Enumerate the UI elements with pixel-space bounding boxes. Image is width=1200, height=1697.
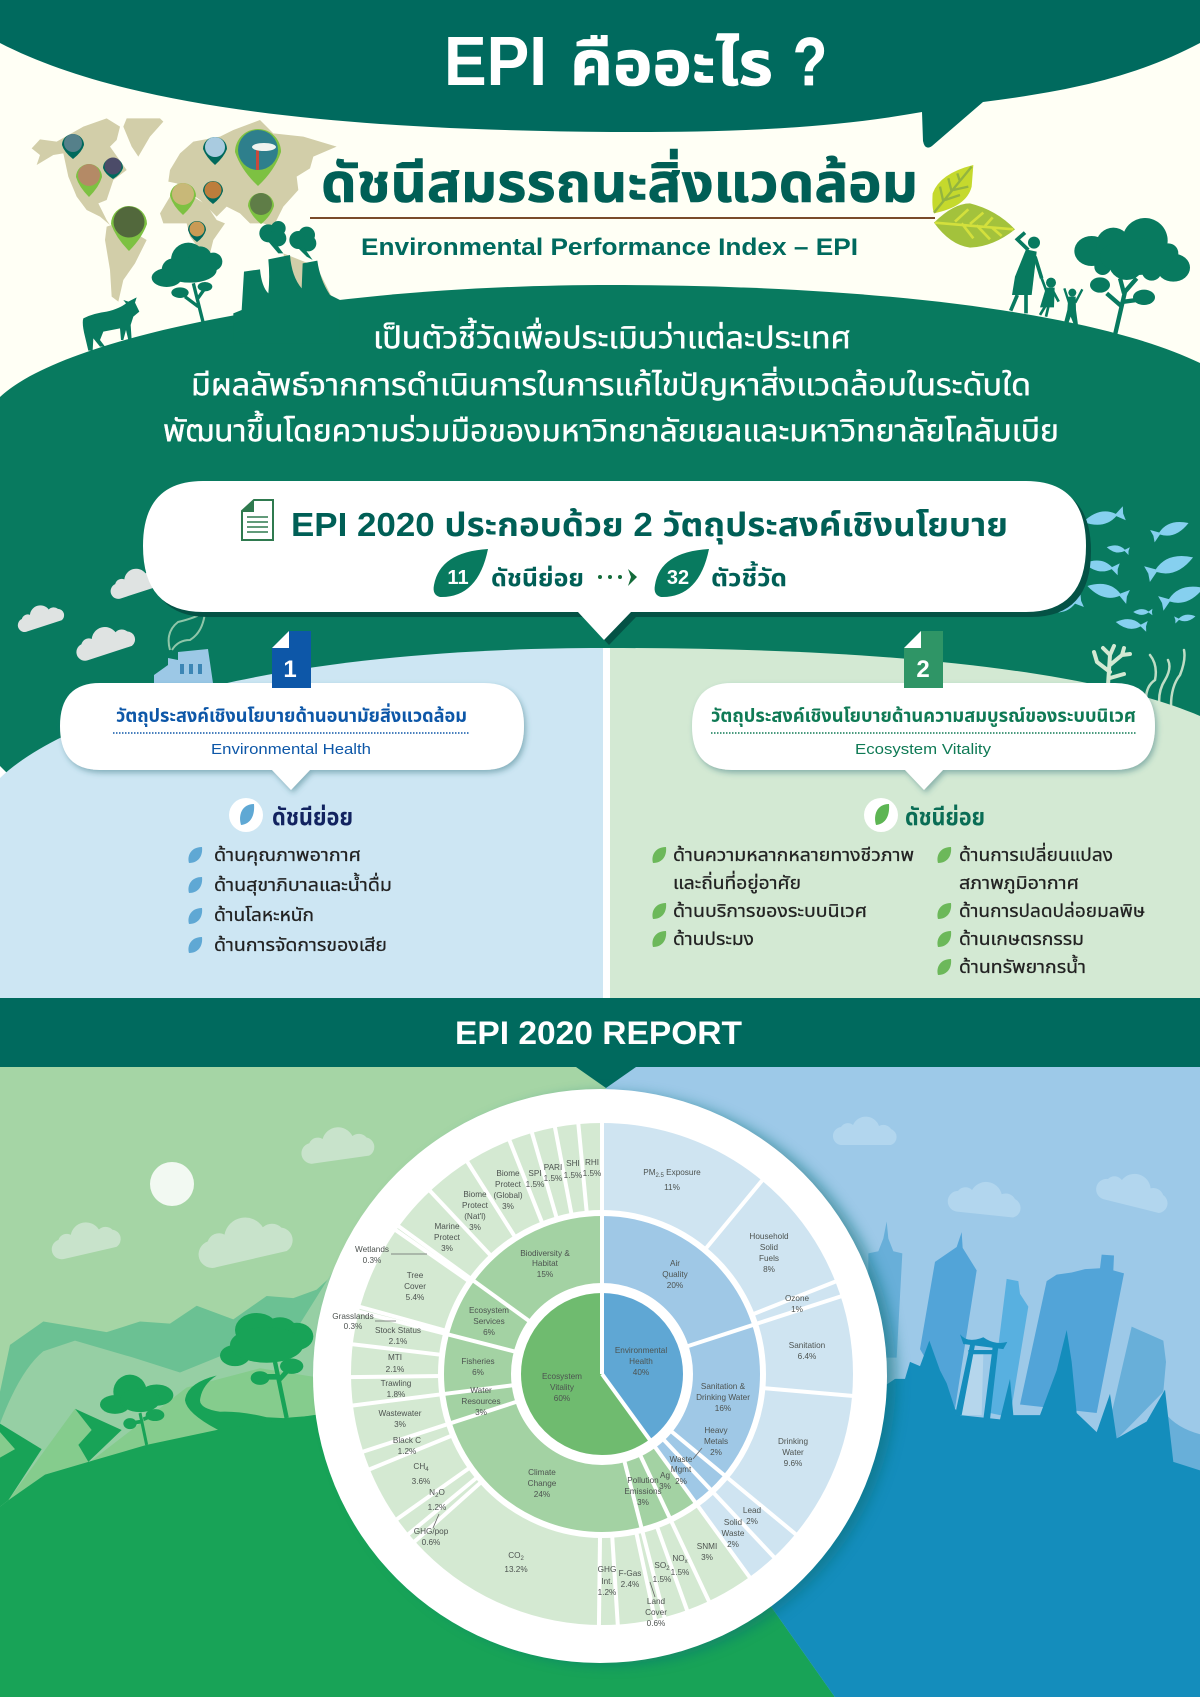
labels: ecosystem vitality: Water [470,1386,492,1395]
center white divider [603,648,610,998]
intro paragraph: มีผลลัพธ์จากการดำเนินการในการแก้ไขปัญหาสิ่งแวดล้อมในระดับใด [191,366,1031,402]
lower scene: green hill [0,1404,835,1697]
labels: environmental health: Waste [722,1529,745,1538]
labels: environmental health: 16% [715,1404,731,1413]
heading: subindex left [229,798,353,832]
labels: environmental health: Solid [724,1518,743,1527]
outer dividers [348,1120,855,1628]
title: ? [793,24,827,100]
labels: ecosystem vitality: Climate [528,1468,556,1477]
lower scene: right sky [606,1060,1200,1697]
labels: ecosystem vitality: Land [647,1597,666,1606]
tab number 2: 2 [916,656,930,683]
labels: environmental health: Ozone [785,1294,810,1303]
tab number 1: 1 [283,656,297,683]
labels: ecosystem vitality: Pollution [627,1476,659,1485]
labels: environmental health: Sanitation & [701,1382,746,1391]
icon: leaves [932,165,1015,248]
lower scene: left sky [0,1060,606,1697]
labels: ecosystem vitality: 1.5% [564,1171,582,1180]
labels: ecosystem vitality: Fisheries [461,1357,495,1366]
list: ecosystem vitality subindices column 1 [652,845,914,949]
labels: environmental health: 2.5 [656,1173,665,1179]
labels: ecosystem vitality: Ecosystem [542,1372,582,1381]
labels: ecosystem vitality: 2 [666,1566,670,1572]
labels: ecosystem vitality: 1.5% [671,1568,689,1577]
labels: environmental health: Health [629,1357,653,1366]
labels: environmental health: 2% [727,1540,739,1549]
heading: subindex right: ดัชนีย่อย [905,803,985,831]
labels: ecosystem vitality: 2.1% [389,1337,407,1346]
labels: ecosystem vitality: Change [528,1479,557,1488]
silhouette: family and tree [1011,218,1190,335]
middle ring segments [478,1250,726,1498]
label indicators: ตัวชี้วัด [711,561,787,592]
list: environmental health subindices: ด้านสุขาภิบาลและน้ำดื่ม [214,872,392,896]
labels: ecosystem vitality: GHG [598,1565,616,1574]
labels: ecosystem vitality: GHG/pop [414,1527,449,1536]
list: environmental health subindices: ด้านโลหะหนัก [214,905,314,925]
labels: environmental health: Air [670,1259,680,1268]
labels: ecosystem vitality: x [685,1559,688,1565]
inner dividers [602,1290,651,1442]
labels: environmental health: Drinking [778,1437,808,1446]
labels: ecosystem vitality: 1.5% [544,1174,562,1183]
dotted arrow [598,569,637,586]
lower scene: trees [100,1313,313,1445]
panel: environmental health background [0,648,604,998]
labels: environmental health: 6.4% [798,1352,816,1361]
list: ecosystem vitality subindices column 2: ด้านทรัพยากรน้ำ [959,954,1086,977]
labels: ecosystem vitality: 2 [520,1556,524,1562]
labels: environmental health [615,1168,826,1549]
labels: ecosystem vitality: Stock Status [375,1326,421,1335]
leaf badge 11: 11 [447,567,469,589]
list: ecosystem vitality subindices column 1: ด้านประมง [673,929,754,949]
labels: ecosystem vitality: MTI [388,1353,402,1362]
list: ecosystem vitality subindices column 2 [937,842,1145,977]
tab number 2 [904,631,943,688]
labels: ecosystem vitality: (Global) [493,1191,523,1200]
labels: environmental health: PM [643,1168,656,1177]
label subindices: ดัชนีย่อย [491,564,584,592]
lower scene: right clouds [833,1117,1173,1218]
intro paragraph [163,317,1059,448]
outer ring segments [394,1166,810,1582]
labels: ecosystem vitality: 15% [537,1270,553,1279]
tab number 1 [272,631,311,688]
labels: ecosystem vitality: Protect [462,1201,489,1210]
labels: ecosystem vitality: N [429,1488,435,1497]
labels: ecosystem vitality: 24% [534,1490,550,1499]
labels: environmental health: Waste [670,1455,693,1464]
lower scene: giant swing and temple ground [700,1330,1200,1697]
heading: subindex right [864,798,985,832]
list: ecosystem vitality subindices column 2: สภาพภูมิอากาศ [959,873,1079,895]
labels: ecosystem vitality: 3% [394,1420,406,1429]
labels: environmental health: Fuels [759,1254,779,1263]
labels: ecosystem vitality: 1.2% [428,1503,446,1512]
subtitle thai: ดัชนีสมรรถนะสิ่งแวดล้อม [321,149,918,214]
callout: ecosystem vitality: Ecosystem Vitality [855,741,992,758]
labels: ecosystem vitality: Marine [434,1222,460,1231]
subtitle rule [310,217,935,219]
labels: ecosystem vitality: 1.2% [598,1588,616,1597]
labels: ecosystem vitality [332,1158,717,1628]
labels: ecosystem vitality: 6% [472,1368,484,1377]
leaf badge 11 [434,549,488,597]
labels: ecosystem vitality: 6% [483,1328,495,1337]
title: คืออะไร [570,30,773,99]
labels: ecosystem vitality: Wetlands [355,1245,389,1254]
labels: environmental health: Exposure [664,1168,701,1177]
labels: ecosystem vitality: Grasslands [332,1312,374,1321]
callout: ecosystem vitality [692,683,1155,790]
labels: ecosystem vitality: RHI [585,1158,599,1167]
labels: ecosystem vitality: 1.5% [653,1575,671,1584]
callout: environmental health [60,683,524,790]
labels: environmental health: 11% [664,1183,680,1192]
report title: EPI 2020 REPORT [455,1015,742,1051]
leaf badge 32: 32 [667,567,689,589]
leader lines [375,1254,702,1597]
labels: ecosystem vitality: (Nat'l) [464,1212,486,1221]
labels: environmental health: Lead [743,1506,762,1515]
labels: environmental health: 20% [667,1281,683,1290]
labels: ecosystem vitality: 3% [701,1553,713,1562]
heading: subindex left: ดัชนีย่อย [272,803,353,831]
middle dividers [443,1214,754,1529]
silhouette: tree, cow and factory [83,221,340,351]
report band [0,998,1200,1088]
labels: ecosystem vitality: 2.4% [621,1580,639,1589]
labels: ecosystem vitality: Habitat [532,1259,559,1268]
labels: ecosystem vitality: Trawling [381,1379,412,1388]
labels: ecosystem vitality: NO [672,1554,685,1563]
labels: ecosystem vitality: Black C [393,1436,421,1445]
labels: ecosystem vitality: CO [508,1551,520,1560]
list: environmental health subindices [188,845,392,955]
labels: ecosystem vitality: 3.6% [412,1477,430,1486]
callout: environmental health: Environmental Health [211,741,371,758]
icon: factory with leaf smoke [154,612,214,690]
labels: ecosystem vitality: Biome [463,1190,487,1199]
callout: EPI 2020 pill [143,481,1091,645]
list: environmental health subindices: ด้านคุณภาพอากาศ [214,845,361,866]
labels: ecosystem vitality: SHI [566,1159,580,1168]
labels: ecosystem vitality: Int. [601,1577,613,1586]
list: ecosystem vitality subindices column 2: ด้านเกษตรกรรม [959,929,1084,949]
labels: environmental health: 40% [633,1368,649,1377]
map pins [62,129,281,251]
labels: ecosystem vitality: 3% [475,1408,487,1417]
callout: environmental health: วัตถุประสงค์เชิงนโยบายด้านอนามัยสิ่งแวดล้อม [116,703,467,727]
labels: ecosystem vitality: CH [413,1462,425,1471]
lower scene: sun [150,1162,194,1206]
labels: environmental health: Heavy [704,1426,729,1435]
intro paragraph: เป็นตัวชี้วัดเพื่อประเมินว่าแต่ละประเทศ [373,317,851,355]
labels: ecosystem vitality: 3% [637,1498,649,1507]
labels: ecosystem vitality: O [438,1488,445,1497]
labels: ecosystem vitality: 2.1% [386,1365,404,1374]
leaf badge 32 [655,549,709,597]
labels: ecosystem vitality: Protect [495,1180,522,1189]
labels: ecosystem vitality: 2 [435,1493,439,1499]
clouds on green [14,561,165,663]
labels: ecosystem vitality: 1.5% [526,1180,544,1189]
labels: ecosystem vitality: Tree [407,1271,424,1280]
labels: environmental health: Household [749,1232,789,1241]
labels: ecosystem vitality: 3% [469,1223,481,1232]
labels: environmental health: Environmental [615,1346,667,1355]
icon: coral [1094,646,1130,685]
labels: environmental health: Quality [662,1270,689,1279]
list: ecosystem vitality subindices column 1: ด้านความหลากหลายทางชีวภาพ [673,845,914,865]
labels: ecosystem vitality: 1.2% [398,1447,416,1456]
labels: ecosystem vitality: 1.8% [387,1390,405,1399]
labels: ecosystem vitality: 3% [659,1482,671,1491]
labels: ecosystem vitality: 1.5% [583,1169,601,1178]
pill heading: EPI 2020 ประกอบด้วย 2 วัตถุประสงค์เชิงนโยบาย [291,506,1008,545]
labels: ecosystem vitality: Emissions [624,1487,662,1496]
labels: ecosystem vitality: Cover [404,1282,426,1291]
labels: environmental health: Solid [760,1243,779,1252]
labels: environmental health: 1% [791,1305,803,1314]
title [444,22,827,100]
callout: ecosystem vitality: วัตถุประสงค์เชิงนโยบายด้านความสมบูรณ์ของระบบนิเวศ [711,705,1136,727]
labels: environmental health: 2% [746,1517,758,1526]
lower scene: left clouds [47,1123,376,1271]
labels: ecosystem vitality: PARI [544,1163,562,1172]
list: environmental health subindices: ด้านการจัดการของเสีย [214,935,387,955]
labels: ecosystem vitality: 0.3% [363,1256,381,1265]
labels: environmental health: 8% [763,1265,775,1274]
inner ring segments [562,1334,642,1414]
icon: document [242,500,273,540]
fish shoal [1043,506,1200,632]
intro paragraph: พัฒนาขึ้นโดยความร่วมมือของมหาวิทยาลัยเยลและมหาวิทยาลัยโคลัมเบีย [163,410,1059,448]
labels: environmental health: 9.6% [784,1459,802,1468]
green hill [0,285,1200,800]
labels: ecosystem vitality: 5.4% [406,1293,424,1302]
lower scene: mountains and hills [0,1260,340,1507]
panel: ecosystem vitality background [610,648,1200,998]
labels: ecosystem vitality: 0.6% [422,1538,440,1547]
labels: ecosystem vitality: Cover [645,1608,667,1617]
labels: ecosystem vitality: Vitality [550,1383,575,1392]
top speech bubble [0,0,1200,148]
donut chart [313,1089,896,1664]
labels: ecosystem vitality: Ag [660,1471,670,1480]
subtitle english: Environmental Performance Index – EPI [361,234,858,261]
labels: ecosystem vitality: 0.6% [647,1619,665,1628]
labels: ecosystem vitality: SPI [528,1169,542,1178]
labels: ecosystem vitality: 60% [554,1394,570,1403]
labels: ecosystem vitality: Biome [496,1169,520,1178]
labels: ecosystem vitality: Biodiversity & [520,1249,570,1258]
labels: ecosystem vitality: SNMI [697,1542,717,1551]
labels: ecosystem vitality: SO [654,1561,666,1570]
list: ecosystem vitality subindices column 2: ด้านการเปลี่ยนแปลง [959,842,1113,865]
labels: environmental health: Drinking Water [696,1393,750,1402]
labels: environmental health: Metals [704,1437,728,1446]
list: ecosystem vitality subindices column 2: ด้านการปลดปล่อยมลพิษ [959,901,1145,921]
labels: environmental health: Water [782,1448,804,1457]
labels: ecosystem vitality: Protect [434,1233,461,1242]
labels: ecosystem vitality: 3% [441,1244,453,1253]
labels: ecosystem vitality: Resources [461,1397,501,1406]
labels: environmental health: 2% [675,1477,687,1486]
labels: ecosystem vitality: 4 [425,1467,429,1473]
labels: environmental health: Mgmt [671,1465,692,1474]
labels: ecosystem vitality: 0.3% [344,1322,362,1331]
labels: ecosystem vitality: 13.2% [504,1565,528,1574]
labels: ecosystem vitality: Wastewater [379,1409,422,1418]
lower scene: city skyline [868,1221,1200,1473]
title: EPI [444,22,547,100]
labels: environmental health: 2% [710,1448,722,1457]
labels: ecosystem vitality: F-Gas [619,1569,641,1578]
icon: seaweed [1146,650,1184,720]
list: ecosystem vitality subindices column 1: ด้านบริการของระบบนิเวศ [673,901,867,921]
world map [32,118,337,302]
labels: environmental health: Sanitation [789,1341,826,1350]
labels: ecosystem vitality: 3% [502,1202,514,1211]
list: ecosystem vitality subindices column 1: และถิ่นที่อยู่อาศัย [673,870,801,895]
labels: ecosystem vitality: Ecosystem [469,1306,509,1315]
labels: ecosystem vitality: Services [473,1317,505,1326]
